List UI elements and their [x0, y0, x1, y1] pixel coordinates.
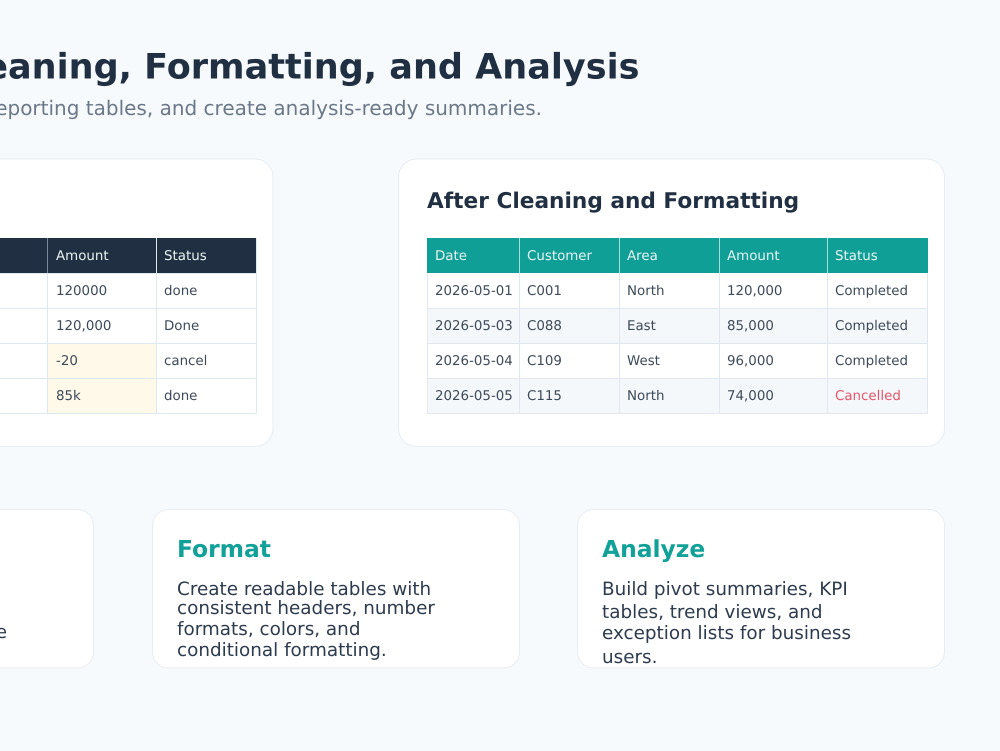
- after table: Completed: [835, 284, 908, 299]
- analyze text: users.: [602, 647, 657, 668]
- after table: Cancelled: [835, 389, 901, 404]
- card: format: [152, 510, 520, 668]
- before table: 120,000: [56, 319, 111, 334]
- panel: after cleaning and formatting: [398, 159, 944, 446]
- before table: Amount: [56, 249, 109, 264]
- before table: 85k: [56, 389, 81, 404]
- after table: 2026-05-01: [435, 284, 513, 299]
- after table: Completed: [835, 354, 908, 369]
- before table: done: [164, 284, 197, 299]
- after table: [427, 238, 928, 414]
- format text: formats, colors, and: [177, 619, 360, 640]
- format text: conditional formatting.: [177, 640, 387, 661]
- before table: cancel: [164, 354, 207, 369]
- card: analyze: [578, 510, 944, 668]
- analyze heading: Analyze: [602, 535, 705, 563]
- after table: C109: [527, 354, 562, 369]
- after table: North: [627, 284, 664, 299]
- after table: Date: [435, 249, 467, 264]
- analyze text: [602, 579, 851, 668]
- after table: C088: [527, 319, 562, 334]
- after table: East: [627, 319, 656, 334]
- after table: Amount: [727, 249, 780, 264]
- panel: before cleaning: [0, 159, 273, 446]
- before table: [0, 238, 256, 414]
- format text: Create readable tables with: [177, 579, 431, 600]
- after table: 2026-05-04: [435, 354, 513, 369]
- after table: Customer: [527, 249, 593, 264]
- before table: 120000: [56, 284, 107, 299]
- before table: -20: [56, 354, 78, 369]
- after table: 2026-05-05: [435, 389, 513, 404]
- format heading: Format: [177, 535, 271, 563]
- format text: [177, 579, 435, 661]
- before table: Status: [164, 249, 207, 264]
- analyze text: Build pivot summaries, KPI: [602, 579, 848, 600]
- format text: consistent headers, number: [177, 598, 435, 619]
- card: clean: [0, 510, 94, 668]
- after table: 120,000: [727, 284, 782, 299]
- after table: Area: [627, 249, 658, 264]
- after table: West: [627, 354, 660, 369]
- after table: 96,000: [727, 354, 774, 369]
- after table: C001: [527, 284, 562, 299]
- after table: North: [627, 389, 664, 404]
- after table: 2026-05-03: [435, 319, 513, 334]
- after table: Completed: [835, 319, 908, 334]
- before table: Done: [164, 319, 199, 334]
- analyze text: exception lists for business: [602, 623, 851, 644]
- after table: C115: [527, 389, 562, 404]
- after table: 74,000: [727, 389, 774, 404]
- after table: 85,000: [727, 319, 774, 334]
- panel heading: After Cleaning and Formatting: [427, 189, 799, 214]
- analyze text: tables, trend views, and: [602, 602, 823, 623]
- after table: Status: [835, 249, 878, 264]
- before table: done: [164, 389, 197, 404]
